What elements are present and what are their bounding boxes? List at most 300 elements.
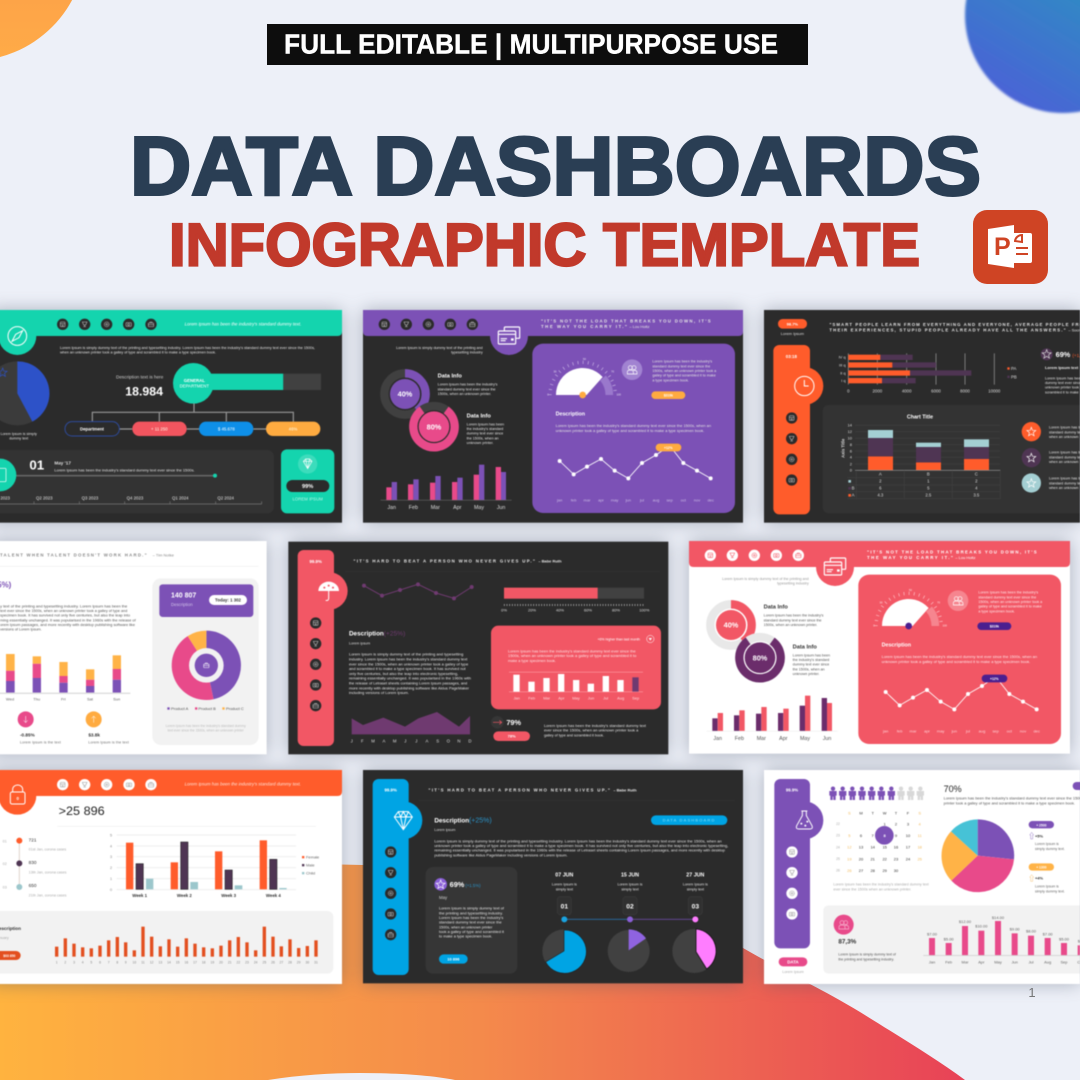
grouped bar chart: 4: [110, 844, 112, 848]
donut: 40 percent: 40%: [724, 621, 739, 630]
pie caption: dummy text: [9, 437, 28, 441]
description: Description: [349, 631, 384, 638]
quote: "SMART PEOPLE LEARN FROM EVERYTHING AND EVERYONE, AVERAGE PEOPLE FROM: [829, 322, 1080, 327]
paragraph: orem Ipsum passages, and more recently with desktop publishing software like: [0, 623, 135, 627]
stat: down: [18, 711, 61, 745]
line chart: jun: [625, 498, 631, 503]
calendar: T: [895, 811, 898, 816]
bar chart: May: [474, 505, 484, 511]
chart panel: 6: [850, 448, 853, 453]
panel: slide 1 teal dashboard: [0, 310, 342, 523]
daily bars panel: 30: [305, 960, 309, 964]
quote: [541, 318, 711, 329]
metric: 18.984: 18.984: [125, 384, 163, 398]
data info 1: Data Info: [764, 605, 788, 611]
area chart: A: [426, 739, 429, 744]
bar chart: $5.00: [1059, 936, 1070, 941]
daily bars panel: 20: [219, 960, 223, 964]
grouped bar chart: Child: [306, 871, 315, 876]
pie: 02: [608, 929, 650, 972]
stat: 69 percent: [1041, 348, 1080, 394]
timeline panel: 01: [29, 458, 45, 473]
calendar: 9: [895, 833, 898, 838]
stat card: May: [439, 895, 448, 900]
data info 2: Lorem Ipsum has been: [467, 422, 504, 426]
chart panel: 8: [850, 442, 853, 447]
general department progress: DEPARTMENT: [180, 384, 209, 389]
side bar: [298, 550, 348, 746]
donut: 80 percent: [731, 629, 789, 687]
icon row: [57, 319, 157, 330]
coral card: Sep: [632, 695, 640, 700]
left caption: [722, 577, 809, 586]
gauge: 0: [873, 623, 875, 627]
coral card: Feb: [528, 695, 536, 700]
timeline panel: Q3 2023: [82, 496, 99, 501]
coral card: Aug: [617, 695, 624, 700]
daily bars panel: 22: [236, 960, 240, 964]
data info 1: Lorem Ipsum has been the industry's: [764, 614, 824, 618]
timeline list: 03: [3, 886, 7, 890]
product card: [152, 578, 259, 745]
line chart: jul: [965, 729, 970, 734]
area chart: F: [361, 739, 364, 744]
org connector lines: [92, 403, 293, 429]
coral card: 1500s, when an unknown printer took a galley of type and scrambled it to: [508, 654, 636, 658]
description: [882, 643, 1037, 664]
quote: – Lou Holtz: [629, 324, 649, 329]
pie: 03: [672, 929, 716, 973]
horizontal bar chart: [839, 353, 1017, 393]
chart panel: 0: [850, 468, 853, 473]
calendar: 27: [859, 868, 864, 873]
line chart: oct: [681, 498, 687, 503]
product card: Today: 1 302: [215, 598, 242, 603]
subtitle: infographic template: INFOGRAPHIC TEMPLATE: [169, 212, 920, 278]
bar chart: $12.00: [959, 919, 972, 924]
grouped bar chart: Week 3: [221, 893, 237, 898]
stat: down: Lorem Ipsum is the text: [20, 741, 61, 745]
quote: TALENT WHEN TALENT DOESN'T WORK HARD.": [0, 552, 147, 557]
pie caption: Lorem Ipsum is simply: [0, 432, 37, 436]
horizontal bar chart: PB: [1011, 374, 1017, 379]
area chart: A: [383, 739, 386, 744]
bar chart: $10.00: [975, 924, 988, 929]
description: [349, 631, 471, 695]
bar chart: Feb: [409, 505, 418, 511]
calendar: T: [871, 811, 874, 816]
date columns: 02: [626, 903, 634, 910]
daily bars panel: 1: [56, 960, 58, 964]
bar chart: Apr: [978, 959, 985, 964]
stat card: Lorem Ipsum is simply dummy text of: [439, 907, 505, 911]
icon: people: [622, 359, 642, 380]
data info 2: the industry's standard: [467, 427, 503, 431]
data info 2: dummy text ever since: [467, 432, 503, 436]
header bar: [363, 310, 743, 336]
stat: 69 percent: 69%: [1056, 350, 1071, 359]
date columns: Lorem Ipsum is: [617, 882, 643, 886]
paragraph: remaining essentially unchanged. It was popularised in the 1960s with the release of Letraset sheets containing Lorem Ipsum passages, and more recently with desktop: [434, 849, 725, 853]
background bump: bottom centre: [268, 1073, 455, 1080]
bar chart: Jul: [1028, 959, 1034, 964]
background wave: bottom orange to red gradient: [0, 864, 965, 1080]
gauge: 30: [554, 370, 557, 374]
gauge: 30: [880, 601, 883, 605]
bar chart: Feb: [945, 959, 953, 964]
left caption: [396, 346, 483, 355]
description heading: Description: [434, 817, 469, 824]
daily bars panel: 6: [99, 960, 101, 964]
chart panel: Axis Title: [840, 438, 845, 458]
quote: – Tim Notke: [153, 552, 175, 557]
description: Description: [882, 643, 911, 649]
calendar: 4: [919, 821, 922, 826]
calendar: 22: [836, 822, 840, 826]
description: remaining essentially unchanged. It was popularised in the 1960s with: [349, 677, 471, 681]
gauge note: Lorem Ipsum has been the industry's: [978, 591, 1038, 595]
bar chart: Feb: [735, 736, 744, 742]
timeline panel: Q4 2023: [127, 496, 144, 501]
progress bar: 80%: [612, 607, 620, 612]
chart panel: A: [879, 472, 882, 477]
card: 99 percent: 99%: [302, 484, 313, 490]
pill: 98.7 percent: 98.7%: [787, 321, 798, 326]
chart panel: 6: [879, 486, 882, 491]
area chart: D: [468, 739, 472, 744]
chart panel: 3.5: [973, 493, 980, 498]
gauge: 100: [942, 623, 947, 627]
data info 2: Data Info: [793, 644, 817, 650]
timeline list: 13th Jan, corona cases: [29, 870, 67, 874]
timeline list: 21th Jan, corona cases: [29, 894, 67, 898]
stat card: (+1.5%): [465, 883, 481, 888]
grouped bar chart: Week 2: [177, 893, 192, 898]
timeline panel: Q2 2023: [36, 496, 53, 501]
bottom panel: the printing and typesetting industry.: [838, 957, 894, 961]
stat: up: [86, 711, 129, 745]
chart panel: 2: [850, 461, 853, 466]
donut: 80 percent: 80%: [753, 653, 768, 662]
icon: credit cards: [490, 317, 528, 355]
gauge: 70: [937, 601, 941, 605]
daily bars panel: 14: [167, 960, 171, 964]
line chart: may: [937, 729, 944, 734]
bar chart: $7.00: [1043, 931, 1053, 936]
coral card: Jul: [603, 695, 608, 700]
icon: powerpoint: [973, 210, 1048, 284]
calendar: 19: [847, 856, 852, 861]
daily bars panel: 8: [116, 960, 118, 964]
quote: "IT'S HARD TO BEAT A PERSON WHO NEVER GIVES UP.": [353, 559, 535, 564]
note: Lorem Ipsum has been the industry's standard dummy text: [544, 724, 646, 728]
grouped bar chart: Week 4: [266, 893, 281, 898]
panel: slide 7 orange white dashboard: [0, 770, 342, 984]
bar chart: Jun: [1011, 959, 1018, 964]
stat: 79 percent: 78%: [508, 734, 516, 739]
gauge: 0: [547, 392, 549, 396]
stacked bar chart: Sat: [87, 697, 94, 702]
calendar: 26: [847, 868, 852, 873]
horizontal bar chart: PA: [1011, 366, 1017, 371]
daily bars panel: 11: [141, 960, 145, 964]
line chart: nov: [694, 498, 700, 503]
callout: plus 2500: [1029, 821, 1065, 851]
stat card: 69%: [450, 880, 465, 889]
description: the release of Letraset sheets containing Lorem Ipsum passages, and: [349, 681, 467, 685]
data info 2: [467, 413, 504, 445]
area chart: M: [393, 739, 397, 744]
side bar: 99.9%: [385, 788, 397, 793]
calendar: W: [883, 811, 887, 816]
left caption: Lorem Ipsum is simply dummy text of the printing and: [396, 346, 483, 350]
note: [544, 724, 646, 737]
pills row: + 11 250: [151, 427, 168, 432]
calendar: 3: [907, 821, 910, 826]
horizontal bar chart: 0: [847, 388, 850, 393]
donut: 40 percent: [710, 604, 752, 646]
description heading: Lorem ipsum: [434, 828, 455, 832]
line chart: apr: [924, 729, 931, 734]
area chart: J: [415, 739, 417, 744]
bar chart: Apr: [453, 505, 462, 511]
bar chart: Jan: [713, 736, 722, 742]
gauge note: 1500s, when an unknown printer took a: [978, 600, 1043, 604]
grouped bar chart: Week 1: [132, 893, 148, 898]
calendar: 6: [860, 833, 863, 838]
data info 1: 1500s, when an unknown printer.: [438, 392, 491, 396]
quote: THEIR EXPERIENCES, STUPID PEOPLE ALREADY HAVE ALL THE ANSWERS.": [829, 328, 1066, 333]
chart panel: 12: [848, 429, 853, 434]
area chart: J: [351, 739, 353, 744]
legend: Product C: [226, 706, 244, 711]
bar chart: $7.00: [927, 931, 938, 936]
calendar: F: [907, 811, 910, 816]
calendar: 7: [872, 833, 875, 838]
date columns: [552, 873, 708, 915]
bar chart: May: [800, 736, 810, 742]
stat: up: $3.8k: [88, 733, 100, 738]
description: Lorem Ipsum has been the industry's standard dummy text ever since the 1500s, when an: [882, 655, 1037, 659]
purple panel: [532, 344, 735, 513]
note: Lorem Ipsum has been the industry's standard dummy: [166, 724, 246, 728]
stat: 70 percent: 70%: [944, 784, 962, 794]
chart panel: 2: [879, 479, 882, 484]
calendar: 15: [882, 845, 888, 850]
pills row: Department: [80, 427, 105, 432]
timeline panel: May '17: [54, 461, 71, 466]
donut: 40 percent: [384, 373, 426, 415]
data info 2: Lorem Ipsum has been: [793, 653, 830, 657]
daily bars panel: 19: [210, 960, 214, 964]
daily bars panel: [0, 911, 333, 974]
description heading: (+25%): [469, 817, 492, 824]
background blob: top-left orange: [0, 0, 86, 61]
coral card: Mar: [543, 695, 551, 700]
calendar: 2: [895, 821, 898, 826]
gauge note: standard dummy text ever since the: [652, 364, 710, 368]
timeline list: 830: [29, 860, 37, 865]
line chart: mar: [584, 498, 591, 503]
background blob: top-right blue: [965, 0, 1080, 113]
side bar: [773, 345, 823, 514]
grouped bar chart: [110, 833, 320, 898]
legend: [167, 706, 244, 711]
horizontal bar chart: 4000: [902, 388, 912, 393]
grouped bar chart: Male: [306, 863, 315, 868]
pill: data dashboard: DATA DASHBOARD: [663, 818, 714, 823]
title: data dashboards: DATA DASHBOARDS: [130, 120, 981, 212]
calendar: 11: [918, 833, 923, 838]
note: text ever since the 1500s, when an unknown printer: [168, 729, 245, 733]
paragraph: versions of Lorem Ipsum.: [0, 628, 42, 632]
daily bars panel: 31: [314, 960, 318, 964]
grouped bar chart: Female: [306, 855, 320, 860]
horizontal bar chart: 8000: [960, 388, 970, 393]
panel: slide 5 coral dark dashboard: [288, 542, 668, 754]
donut chart: [172, 631, 241, 700]
daily bars panel: 15: [176, 960, 180, 964]
banner: full editable: FULL EDITABLE | MULTIPURPOSE USE: [284, 28, 778, 60]
line chart: +12%: [990, 677, 999, 681]
pill: data dashboard: [651, 815, 727, 825]
gauge note: a type specimen book.: [978, 609, 1015, 613]
description: (+25%): [384, 631, 405, 638]
stat: 69 percent: Lorem Ipsum text: [1045, 365, 1079, 370]
chart panel: 5: [927, 486, 930, 491]
daily bars panel: 13: [158, 960, 162, 964]
quote: – Babe Ruth: [613, 787, 637, 792]
date columns: 03: [692, 903, 699, 910]
pie: 01: [542, 929, 586, 973]
description: only five centuries, but also the leap into electronic typesetting,: [349, 672, 458, 676]
data info 1: standard dummy text ever since the: [764, 618, 822, 622]
calendar: 14: [870, 845, 876, 850]
chart panel: B: [852, 486, 855, 491]
progress bar: 0%: [501, 607, 507, 612]
paragraph: [0, 604, 137, 632]
pill: 319k: [651, 391, 685, 399]
coral card: Lorem Ipsum has been the industry's standard dummy text ever since the: [508, 649, 636, 653]
date columns: simply text: [556, 887, 573, 891]
intro text: Lorem Ipsum is simply dummy text of the printing and typesetting industry. Lorem Ipsum has been the industry's standard dummy text ever since the 1500s,: [60, 346, 315, 350]
data info 1: Data Info: [438, 374, 462, 380]
gauge: [873, 588, 947, 629]
bottom panel: Lorem Ipsum is simply dummy text of: [838, 953, 896, 957]
area chart: M: [371, 739, 375, 744]
timeline panel: Q2 2024: [217, 496, 235, 501]
timeline list: 01: [3, 839, 7, 843]
stat: 79 percent: [491, 716, 530, 741]
line chart: feb: [897, 729, 903, 734]
chart panel: when an unknown: [1049, 486, 1078, 490]
timeline list: 650: [29, 883, 37, 888]
line chart: may: [611, 498, 618, 503]
people pictogram: [829, 786, 924, 800]
stat: 69 percent: scrambled it to make: [1045, 390, 1079, 394]
chart panel: C: [975, 472, 978, 477]
chart panel: B: [927, 472, 930, 477]
quote: "IT'S HARD TO BEAT A PERSON WHO NEVER GIVES UP.": [428, 787, 610, 792]
calendar: M: [859, 811, 863, 816]
daily bars panel: 16: [184, 960, 188, 964]
timeline panel: Lorem Ipsum has been the industry's standard dummy text ever since the 1500s.: [54, 469, 195, 473]
bar chart: Jan: [929, 959, 935, 964]
line chart: aug: [979, 729, 985, 734]
coral card: May: [572, 695, 580, 700]
quote: [867, 549, 1037, 560]
description: more recently with desktop publishing software like Aldus PageMaker: [349, 686, 470, 690]
daily bars panel: 5: [90, 960, 92, 964]
data info 1: 1500s, when an unknown printer.: [764, 623, 817, 627]
intro text: [60, 346, 315, 355]
stat card: took a galley of type and scrambled it: [439, 930, 504, 934]
calendar: 24: [906, 856, 911, 861]
paragraph: Lorem Ipsum is simply dummy text of the printing and typesetting industry. Lorem Ipsum has been the industry's standard dummy text ever since the 1500s, when an: [434, 839, 722, 843]
icon row: [379, 319, 478, 330]
line chart: [882, 675, 1040, 734]
calendar: 12: [847, 845, 852, 850]
bar chart: Mar: [962, 959, 969, 964]
pills row: $ 45.678: [218, 427, 235, 432]
description: Lorem ipsum: [349, 641, 370, 645]
gauge note: standard dummy text ever since the: [978, 595, 1036, 599]
description: Description: [556, 412, 585, 418]
description: unknown printer took a galley of type and scrambled it to make a type specimen book.: [882, 660, 1030, 664]
gauge: 100: [616, 392, 621, 396]
calendar: 18: [917, 845, 923, 850]
daily bars panel: 26: [271, 960, 275, 964]
daily bars panel: 27: [279, 960, 283, 964]
data info 2: dummy text ever since: [793, 663, 829, 667]
area chart: S: [436, 739, 439, 744]
description: [556, 412, 711, 433]
intro text: when an unknown printer took a galley of type and scrambled it to make a type specimen book.: [60, 351, 216, 355]
date columns: 07 JUN: [555, 873, 574, 879]
area chart: [351, 712, 472, 744]
panel: slide 8 blue dark dashboard: [363, 770, 743, 983]
coral card: make a type specimen book.: [508, 659, 556, 663]
chart panel: [823, 405, 1080, 513]
calendar: 24: [836, 845, 840, 849]
gauge: 50: [909, 588, 912, 592]
data info 1: [438, 374, 498, 396]
header text: Lorem Ipsum has been the industry's standard dummy text.: [185, 782, 301, 787]
general department progress: GENERAL: [184, 378, 205, 383]
line sparkline: [362, 582, 474, 600]
pill: 98.7 percent: Lorem Ipsum: [781, 331, 805, 336]
side bar: 99.9%: [786, 788, 798, 793]
line chart: sep: [666, 498, 674, 503]
line chart: dec: [1033, 729, 1040, 734]
description: ever since the 1500s, when an unknown printer took a galley of type: [349, 662, 468, 666]
daily bars panel: 10: [132, 960, 136, 964]
side bar: 99.9%: [310, 559, 322, 564]
line chart: [556, 444, 714, 503]
chart panel: Chart Title: [907, 415, 933, 421]
timeline list: [3, 837, 67, 898]
data info 2: [793, 644, 830, 676]
grouped bar chart: 3: [110, 855, 112, 859]
calendar: [836, 811, 923, 873]
description: industry. Lorem Ipsum has been the industry's standard dummy text: [349, 657, 467, 661]
gauge note: a type specimen book.: [652, 378, 689, 382]
timeline panel: [0, 450, 274, 513]
header bar: [689, 541, 1070, 567]
description: and scrambled it to make a type specimen book. It has survived not: [349, 667, 466, 671]
pie caption: [0, 432, 37, 441]
bar chart: [923, 915, 1080, 964]
